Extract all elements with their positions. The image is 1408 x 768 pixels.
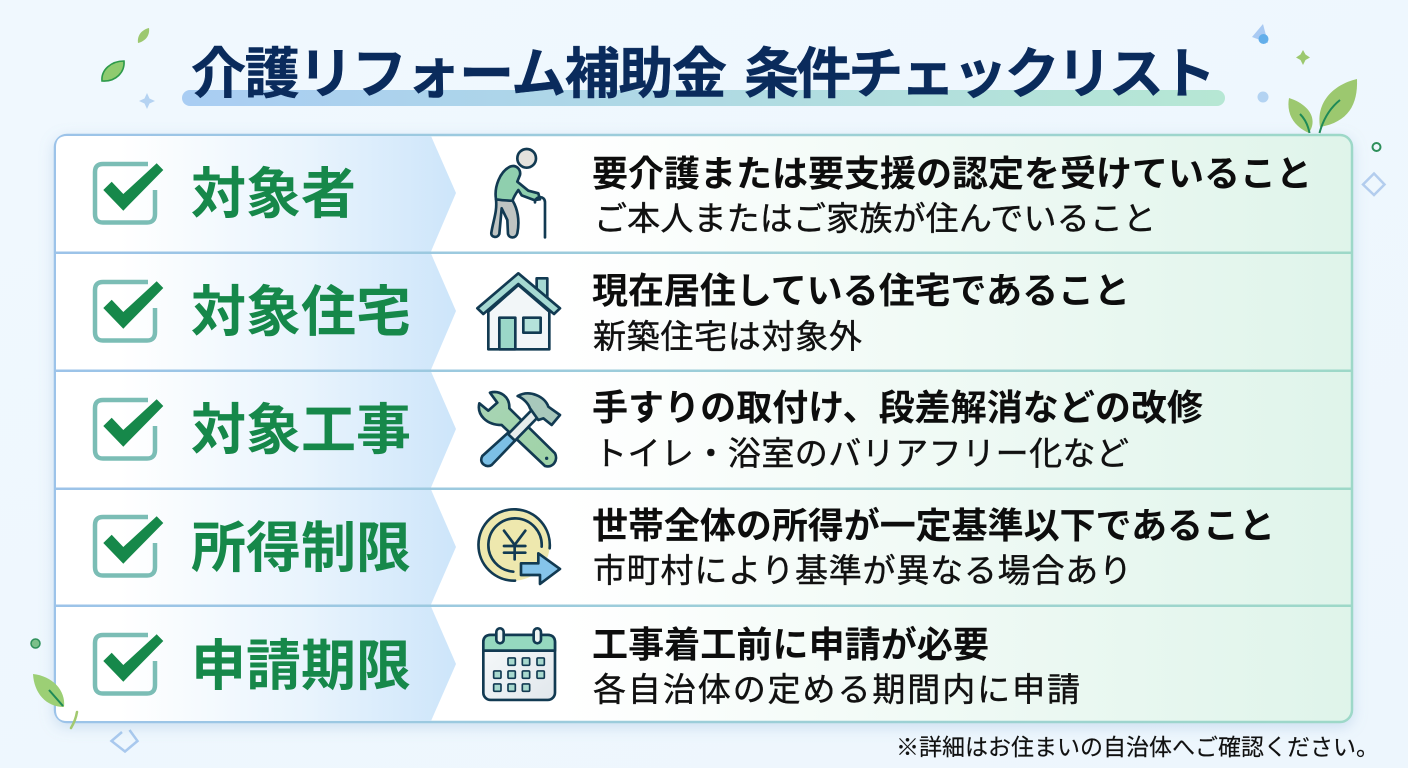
label: 対象者 <box>191 163 356 225</box>
panel background <box>55 135 1352 722</box>
label: 所得制限 <box>191 517 411 579</box>
label arrow: 対象工事 <box>56 372 456 488</box>
icon: calendar <box>483 628 555 700</box>
decoration: bottom-left leaf <box>33 674 77 728</box>
panel: checklist <box>55 135 1352 722</box>
label: 対象工事 <box>191 399 411 461</box>
main condition: 世帯全体の所得が一定基準以下であること <box>592 505 1275 546</box>
check icon <box>95 634 163 694</box>
label arrow: 申請期限 <box>56 606 456 721</box>
row: 申請期限 <box>95 624 1080 708</box>
sub condition: 各自治体の定める期間内に申請 <box>593 671 1080 708</box>
sub condition: トイレ・浴室のバリアフリー化など <box>594 435 1129 472</box>
check icon <box>95 399 163 458</box>
sub condition: 新築住宅は対象外 <box>593 318 862 355</box>
label arrow: 対象者 <box>56 136 456 252</box>
decoration: top-right leaves <box>1288 79 1357 133</box>
row: 所得制限 <box>95 505 1275 589</box>
icon: yen coin with arrow <box>478 509 560 584</box>
main condition: 要介護または要支援の認定を受けていること <box>592 153 1312 194</box>
title: 条件チェックリスト <box>744 43 1216 105</box>
row: 対象住宅 <box>95 270 1130 355</box>
title <box>191 43 1216 105</box>
icon: elderly person with cane <box>491 149 545 237</box>
check icon <box>95 163 163 222</box>
label arrow: 対象住宅 <box>56 254 456 370</box>
check icon <box>95 516 163 576</box>
decoration: top-right sparkles <box>1252 24 1384 195</box>
label: 対象住宅 <box>191 281 411 343</box>
footnote: ※詳細はお住まいの自治体へご確認ください。 <box>896 734 1379 760</box>
title underline <box>182 90 1225 106</box>
decoration: bottom-left dots <box>31 639 138 752</box>
row: 対象者 <box>95 149 1312 237</box>
sub condition: ご本人またはご家族が住んでいること <box>594 200 1156 237</box>
label arrow: 所得制限 <box>56 490 456 604</box>
main condition: 現在居住している住宅であること <box>592 270 1130 311</box>
sub condition: 市町村により基準が異なる場合あり <box>593 552 1132 589</box>
check icon <box>95 281 163 340</box>
main condition: 工事着工前に申請が必要 <box>592 624 989 665</box>
label: 申請期限 <box>191 635 411 697</box>
main condition: 手すりの取付け、段差解消などの改修 <box>592 387 1203 428</box>
row: 対象工事 <box>95 387 1203 472</box>
title: 介護リフォーム補助金 <box>191 43 727 105</box>
decoration: top-left leaves and sparkle <box>102 28 155 109</box>
icon: wrench and hammer <box>479 392 560 466</box>
icon: house <box>477 273 560 349</box>
